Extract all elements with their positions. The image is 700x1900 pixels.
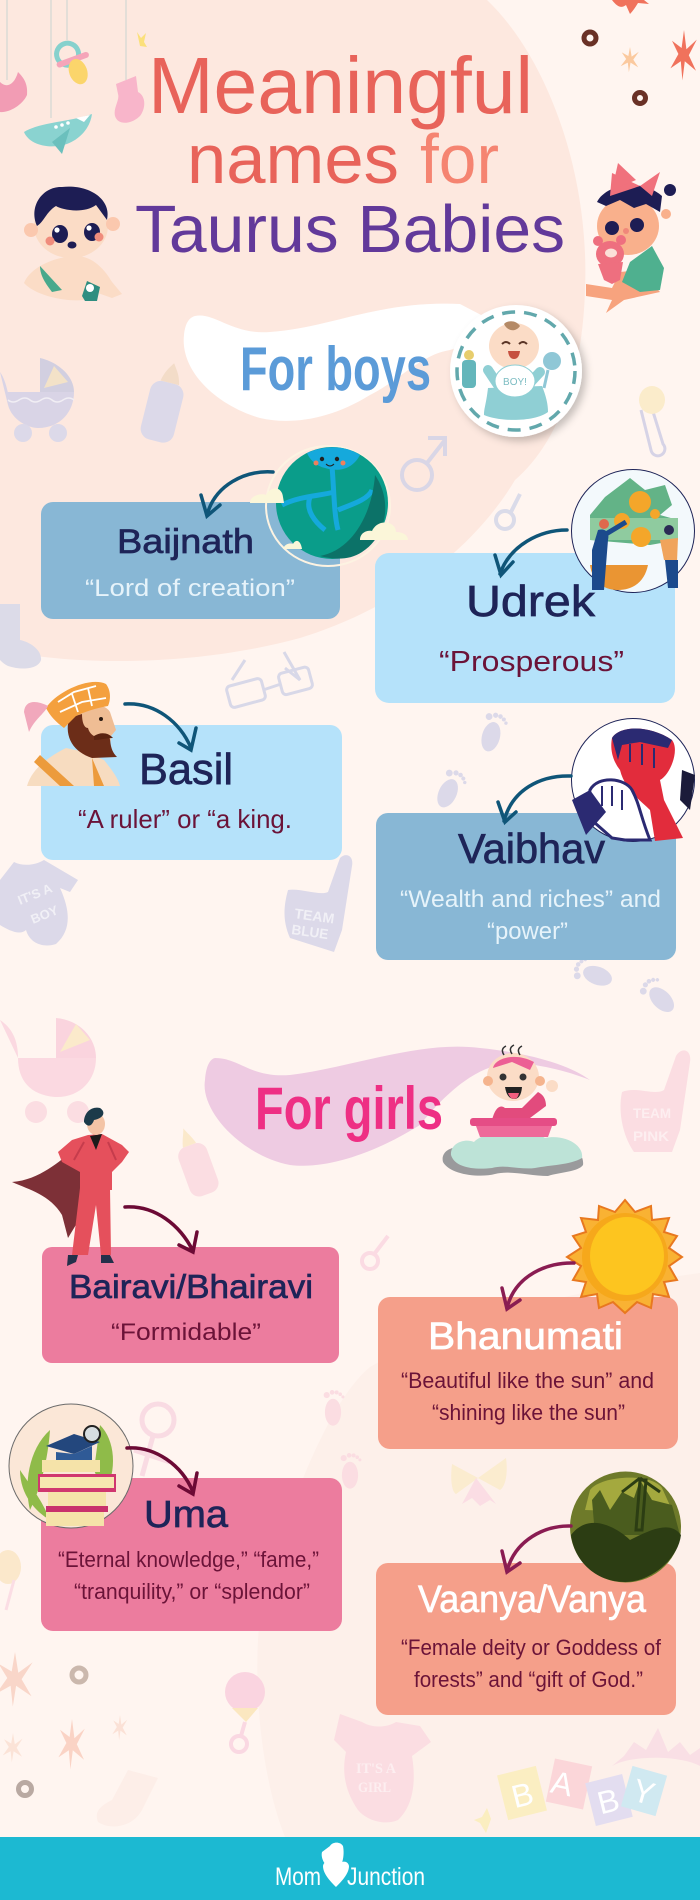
title bbox=[135, 41, 565, 267]
icon: team blue foam hand: BLUE bbox=[291, 921, 329, 942]
background icons: girls section bbox=[0, 1018, 700, 1833]
icon: tiara bbox=[612, 1728, 700, 1766]
arrow: money tree to Udrek bbox=[495, 530, 567, 575]
card: Bhanumati: “shining like the sun” bbox=[432, 1400, 625, 1425]
section heading: for boys: For boys bbox=[240, 335, 431, 404]
icon: stack of books bbox=[9, 1404, 133, 1528]
section heading: for boys bbox=[184, 304, 582, 437]
card: Uma: “tranquility,” or “splendor” bbox=[74, 1579, 310, 1604]
icon: bow bbox=[451, 1458, 507, 1506]
card: Bairavi/Bhairavi: “Formidable” bbox=[111, 1319, 261, 1346]
card: Vaibhav: “Wealth and riches” and bbox=[400, 886, 661, 913]
arrow: fists to Vaibhav bbox=[498, 776, 571, 822]
card: Bhanumati: Bhanumati bbox=[428, 1316, 623, 1358]
background icons: boys section bbox=[0, 358, 681, 1018]
card: Vaibhav bbox=[376, 813, 676, 960]
arrow: globe to Baijnath bbox=[201, 472, 273, 516]
card: Bairavi/Bhairavi bbox=[42, 1247, 339, 1363]
logo: MomJunction bbox=[275, 1843, 425, 1891]
title: Meaningful bbox=[148, 41, 533, 130]
icon: baby blocks bbox=[497, 1759, 667, 1826]
icon: bib bbox=[0, 72, 27, 112]
icon: pram bbox=[0, 358, 74, 442]
icon: money tree bbox=[572, 470, 694, 592]
arrow: sun to Bhanumati bbox=[502, 1263, 574, 1309]
icon: pink bottle bbox=[169, 1123, 221, 1199]
card: Vaanya/Vanya: forests” and “gift of God.” bbox=[414, 1667, 643, 1692]
arrow: king to Basil bbox=[125, 704, 196, 750]
card: Uma: Uma bbox=[144, 1494, 229, 1536]
icon: girl onesie: GIRL bbox=[358, 1780, 391, 1796]
decorative asterisks and donuts: top right bbox=[584, 0, 697, 104]
card: Udrek: Udrek bbox=[466, 577, 596, 626]
icon: sun bbox=[567, 1200, 682, 1313]
icon: bottle bbox=[138, 359, 191, 445]
card: Uma: “Eternal knowledge,” “fame,” bbox=[58, 1547, 319, 1572]
icon: team blue foam hand bbox=[284, 855, 352, 952]
icon: pink pram bbox=[0, 1018, 96, 1123]
icon: safety pin bbox=[639, 386, 665, 456]
icon: team pink foam hand: PINK bbox=[633, 1128, 669, 1144]
icon: forest bbox=[570, 1472, 681, 1582]
icon: baby girl on cloud bbox=[443, 1045, 583, 1176]
icon: yellow safety pin bbox=[0, 1550, 21, 1610]
icon: baby blocks: A bbox=[548, 1764, 577, 1803]
icon: baby girl with teddy bbox=[586, 163, 676, 313]
card: Bairavi/Bhairavi: Bairavi/Bhairavi bbox=[69, 1268, 313, 1305]
icon: pink footprints bbox=[324, 1390, 361, 1489]
icon: raised fists bbox=[572, 718, 695, 842]
icon: girl onesie bbox=[334, 1714, 431, 1822]
icon: female symbol bbox=[134, 1404, 174, 1476]
icon: team pink foam hand: TEAM bbox=[633, 1105, 671, 1121]
card: Vaibhav: “power” bbox=[487, 918, 568, 945]
section heading: for girls bbox=[205, 1045, 590, 1176]
icon: boy badge bbox=[450, 305, 582, 437]
icon: glasses bbox=[226, 652, 313, 708]
icon: toy plane bbox=[24, 114, 92, 154]
icon: king portrait bbox=[24, 682, 120, 786]
icon: sock bbox=[115, 76, 144, 123]
icon: baby blocks: B bbox=[508, 1775, 537, 1815]
icon: small star bbox=[474, 1808, 491, 1833]
background blob: top peach bbox=[0, 0, 585, 661]
card: Basil: “A ruler” or “a king. bbox=[78, 804, 292, 834]
icon: pink pacifier bbox=[362, 1236, 388, 1269]
icon: girl onesie: IT'S A bbox=[356, 1761, 396, 1777]
decorative asterisks and donuts: lower left bbox=[0, 1652, 127, 1796]
icon: pacifier bbox=[51, 37, 98, 90]
icon: faint sock bbox=[97, 1770, 158, 1826]
footer bar bbox=[0, 1837, 700, 1900]
card: Vaanya/Vanya bbox=[376, 1563, 676, 1715]
card: Udrek bbox=[375, 553, 675, 703]
logo: MomJunction: Mom bbox=[275, 1863, 321, 1891]
title: names bbox=[187, 120, 399, 198]
card: Bhanumati bbox=[378, 1297, 678, 1449]
arrow: woman to Bairavi bbox=[125, 1207, 197, 1252]
title: Taurus Babies bbox=[135, 192, 565, 267]
card: Vaanya/Vanya: Vaanya/Vanya bbox=[418, 1579, 647, 1621]
card: Baijnath: Baijnath bbox=[117, 523, 254, 561]
background blob: lower right bbox=[257, 1273, 700, 1837]
icon: pacifier bbox=[496, 494, 520, 529]
card: Udrek: “Prosperous” bbox=[439, 646, 624, 678]
icon: sock bbox=[0, 604, 41, 668]
icon: star bbox=[137, 32, 147, 47]
card: Vaanya/Vanya: “Female deity or Goddess of bbox=[401, 1635, 662, 1660]
icon: boy onesie bbox=[0, 860, 78, 945]
logo: MomJunction: Junction bbox=[347, 1863, 425, 1891]
card: Uma bbox=[41, 1478, 342, 1631]
section heading: for girls: For girls bbox=[255, 1075, 443, 1142]
arrow: forest to Vaanya bbox=[502, 1526, 571, 1572]
icon: boy onesie: BOY bbox=[29, 902, 61, 927]
icon: woman in suit with cape bbox=[12, 1108, 129, 1266]
icon: male symbol bbox=[402, 438, 445, 490]
icon: baby blocks: B bbox=[594, 1781, 623, 1821]
card: Baijnath: “Lord of creation” bbox=[85, 575, 295, 602]
icon: globe bbox=[250, 446, 408, 566]
icon: boy onesie: IT'S A bbox=[16, 880, 55, 908]
card: Baijnath bbox=[41, 502, 340, 619]
hanging mobile: baby items bbox=[0, 0, 147, 154]
icon: rattle bbox=[225, 1672, 265, 1752]
card: Basil: Basil bbox=[139, 745, 233, 794]
icon: boy badge: BOY! bbox=[503, 377, 527, 388]
icon: baby blocks: Y bbox=[629, 1772, 659, 1812]
card: Vaibhav: Vaibhav bbox=[458, 825, 605, 872]
arrow: books to Uma bbox=[127, 1448, 197, 1494]
icon: team pink foam hand bbox=[620, 1050, 690, 1152]
icon: team blue foam hand: TEAM bbox=[294, 905, 335, 927]
card: Bhanumati: “Beautiful like the sun” and bbox=[401, 1368, 654, 1393]
icon: baby boy crawling bbox=[24, 187, 122, 301]
icon: footprints bbox=[432, 710, 681, 1018]
card: Basil bbox=[41, 725, 342, 860]
title: for bbox=[420, 120, 499, 198]
